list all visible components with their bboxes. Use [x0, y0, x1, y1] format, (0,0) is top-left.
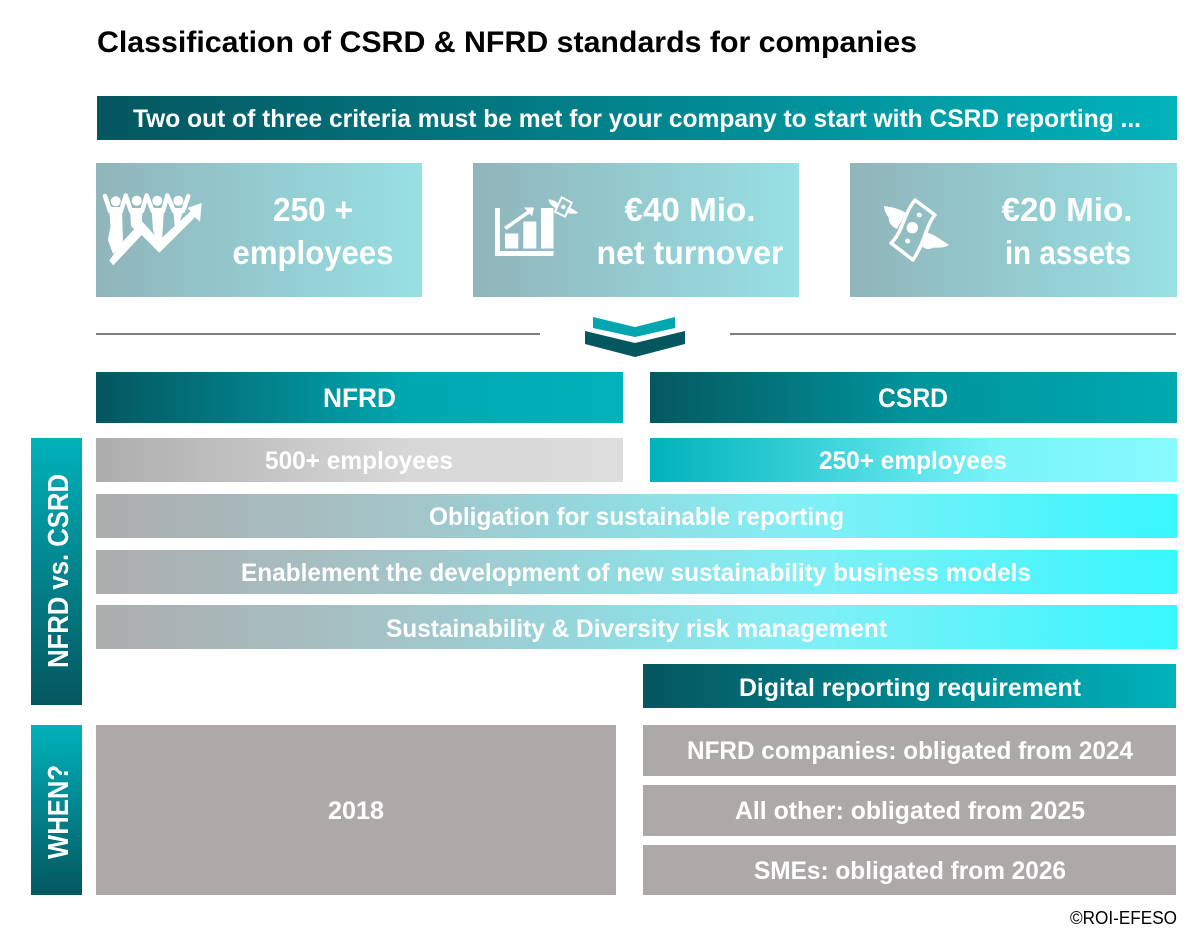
CSRD only: digital reporting	[643, 664, 1176, 708]
side label: NFRD vs. CSRD: NFRD vs. CSRD	[43, 474, 75, 668]
heading: NFRD: NFRD	[323, 383, 396, 413]
panel: employees criterion: employees	[232, 234, 394, 271]
banner: two out of three criteria: Two out of three criteria must be met for your company to start with CSRD reporting ...	[133, 105, 1141, 133]
CSRD date: all other: All other: obligated from 2025	[735, 797, 1085, 825]
CSRD only: digital reporting: Digital reporting requirement	[739, 674, 1082, 702]
panel: net turnover criterion: net turnover	[596, 234, 784, 271]
heading: CSRD	[650, 372, 1177, 423]
icon: bar chart with flying money	[495, 197, 578, 256]
NFRD date: 2018: 2018	[328, 797, 384, 825]
banner: two out of three criteria	[97, 96, 1177, 140]
panel: assets criterion: €20 Mio.	[1002, 191, 1132, 228]
panel: assets criterion: in assets	[1005, 234, 1131, 271]
side label: WHEN?: WHEN?	[43, 765, 75, 859]
shared row: obligation: Obligation for sustainable reporting	[429, 503, 844, 531]
shared row: obligation	[96, 494, 1177, 538]
panel: assets criterion	[850, 163, 1177, 297]
icon: banknote with wings	[884, 200, 949, 260]
shared row: enablement	[96, 550, 1177, 594]
shared row: risk management	[96, 605, 1177, 649]
title: Classification of CSRD & NFRD standards for companies	[97, 26, 917, 59]
NFRD threshold bar	[96, 438, 623, 482]
CSRD date: NFRD companies: NFRD companies: obligated from 2024	[687, 737, 1133, 765]
icon: people on rising arrow	[105, 196, 202, 265]
NFRD threshold bar: 500+ employees	[265, 447, 453, 475]
panel: employees criterion: 250 +	[273, 191, 353, 228]
CSRD date: SMEs	[643, 845, 1176, 895]
shared row: risk management: Sustainability & Diversity risk management	[386, 615, 888, 643]
CSRD date: NFRD companies	[643, 725, 1176, 776]
side label: WHEN?	[31, 725, 82, 895]
shared row: enablement: Enablement the development of new sustainability business models	[241, 559, 1031, 587]
CSRD date: all other	[643, 785, 1176, 836]
heading: CSRD: CSRD	[878, 383, 948, 413]
panel: net turnover criterion: €40 Mio.	[624, 191, 756, 228]
CSRD threshold bar: 250+ employees	[819, 447, 1007, 475]
panel: employees criterion	[96, 163, 422, 297]
heading: NFRD	[96, 372, 623, 423]
NFRD date: 2018	[96, 725, 616, 895]
CSRD date: SMEs: SMEs: obligated from 2026	[754, 857, 1066, 885]
side label: NFRD vs. CSRD	[31, 438, 82, 705]
arrow: double chevron	[585, 317, 685, 357]
copyright: ©ROI-EFESO	[1070, 908, 1177, 928]
CSRD threshold bar	[650, 438, 1177, 482]
panel: net turnover criterion	[473, 163, 799, 297]
